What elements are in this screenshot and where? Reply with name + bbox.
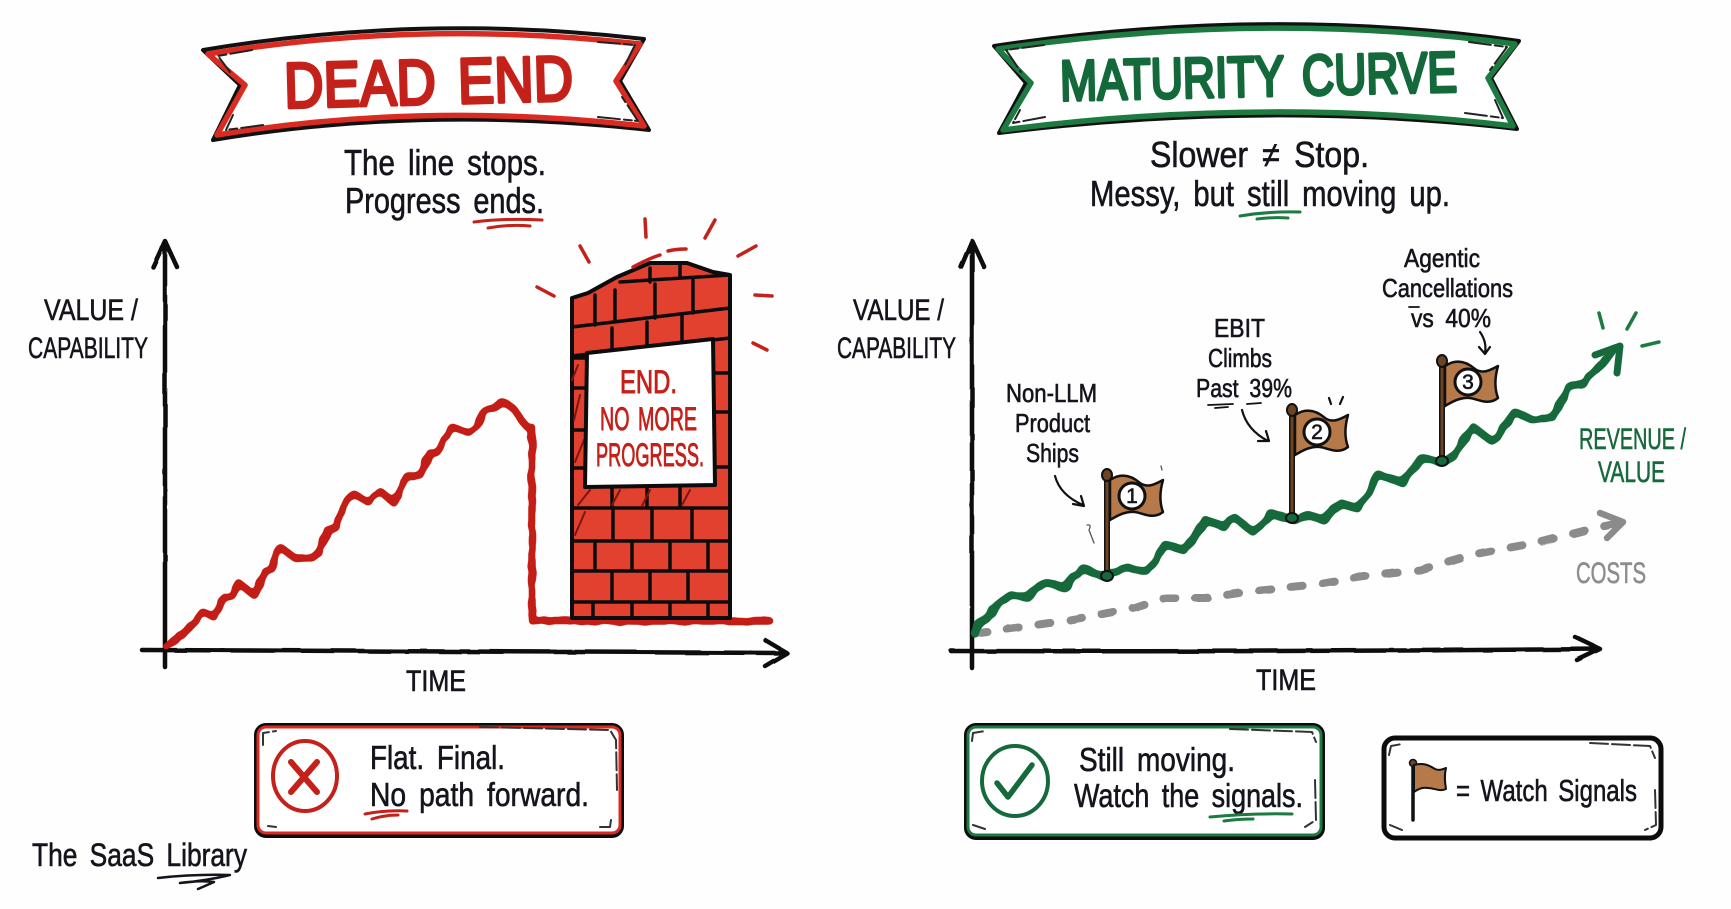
icon: check in circle [982, 746, 1048, 816]
y axis label: CAPABILITY [837, 332, 956, 365]
callout text: No path forward. [370, 776, 589, 813]
heading: dead end: DEAD END [283, 42, 574, 122]
subtitle: the line stops [344, 142, 546, 228]
banner: dead end [203, 28, 649, 140]
callout text [365, 739, 589, 819]
panel: dead end [28, 28, 787, 889]
annotation: non-llm product ships: Non-LLM [1006, 378, 1097, 408]
heading: maturity curve: MATURITY CURVE [1059, 40, 1458, 113]
brick wall [572, 263, 730, 618]
callout text: Watch the signals. [1074, 777, 1303, 814]
axes [142, 241, 787, 667]
y axis label [837, 294, 956, 365]
panel: maturity curve [837, 24, 1686, 838]
subtitle: the line stops: Progress ends. [345, 180, 544, 221]
revenue label: VALUE [1598, 456, 1665, 489]
revenue rays [1599, 313, 1659, 346]
costs label: COSTS [1576, 557, 1646, 590]
flag 1 [1101, 469, 1163, 581]
annotation: ebit climbs past 39%: Climbs [1208, 343, 1272, 373]
callout text: Flat. Final. [370, 739, 505, 776]
impact rays [537, 219, 772, 350]
banner: maturity curve [994, 24, 1519, 133]
annotation: ebit climbs past 39% [1196, 313, 1343, 441]
x axis label: TIME [406, 665, 466, 698]
callout: still moving [966, 725, 1323, 838]
legend text: = Watch Signals [1456, 773, 1637, 808]
red progress line [167, 402, 770, 647]
chart: maturity curve [837, 241, 1686, 697]
flag 1: 1 [1126, 485, 1138, 508]
flag 3: 3 [1462, 371, 1474, 394]
annotation: agentic cancellations vs 40%: vs 40% [1411, 303, 1491, 333]
legend: watch signals [1384, 738, 1661, 838]
subtitle: slower is not stop: Slower ≠ Stop. [1150, 134, 1369, 175]
callout: flat final [256, 725, 622, 836]
flag 2 [1286, 404, 1348, 523]
flag 2: 2 [1311, 421, 1323, 444]
sign: END. [620, 364, 677, 400]
subtitle: the line stops: The line stops. [344, 142, 546, 183]
flag 3 [1436, 355, 1498, 466]
icon: cross in circle [273, 741, 337, 811]
annotation: non-llm product ships [1006, 378, 1162, 543]
callout text [1074, 741, 1303, 821]
annotation: agentic cancellations vs 40%: Agentic [1404, 243, 1480, 273]
sign [585, 339, 715, 487]
icon: flag [1410, 760, 1446, 820]
annotation: non-llm product ships: Product [1015, 408, 1091, 438]
y axis label [28, 294, 148, 365]
x axis label: TIME [1256, 664, 1316, 697]
sign: NO MORE [600, 401, 697, 437]
y axis label: VALUE / [853, 294, 945, 327]
chart: dead end [28, 219, 787, 698]
y axis label: CAPABILITY [28, 332, 148, 365]
callout text: Still moving. [1079, 741, 1235, 778]
costs dashed line [975, 513, 1623, 633]
annotation: ebit climbs past 39%: EBIT [1214, 313, 1265, 343]
y axis label: VALUE / [44, 294, 139, 327]
sign: PROGRESS. [596, 437, 704, 473]
annotation: non-llm product ships: Ships [1026, 438, 1079, 468]
annotation: agentic cancellations vs 40% [1382, 243, 1513, 354]
subtitle: slower is not stop [1090, 134, 1450, 219]
annotation: agentic cancellations vs 40%: Cancellations [1382, 273, 1513, 303]
revenue label [1579, 423, 1686, 489]
annotation: ebit climbs past 39%: Past 39% [1196, 373, 1292, 403]
axes [951, 241, 1600, 668]
brand: the saas library [32, 837, 247, 889]
revenue line [974, 346, 1620, 633]
brand: the saas library: The SaaS Library [32, 837, 247, 873]
subtitle: slower is not stop: Messy, but still moving up. [1090, 173, 1450, 214]
